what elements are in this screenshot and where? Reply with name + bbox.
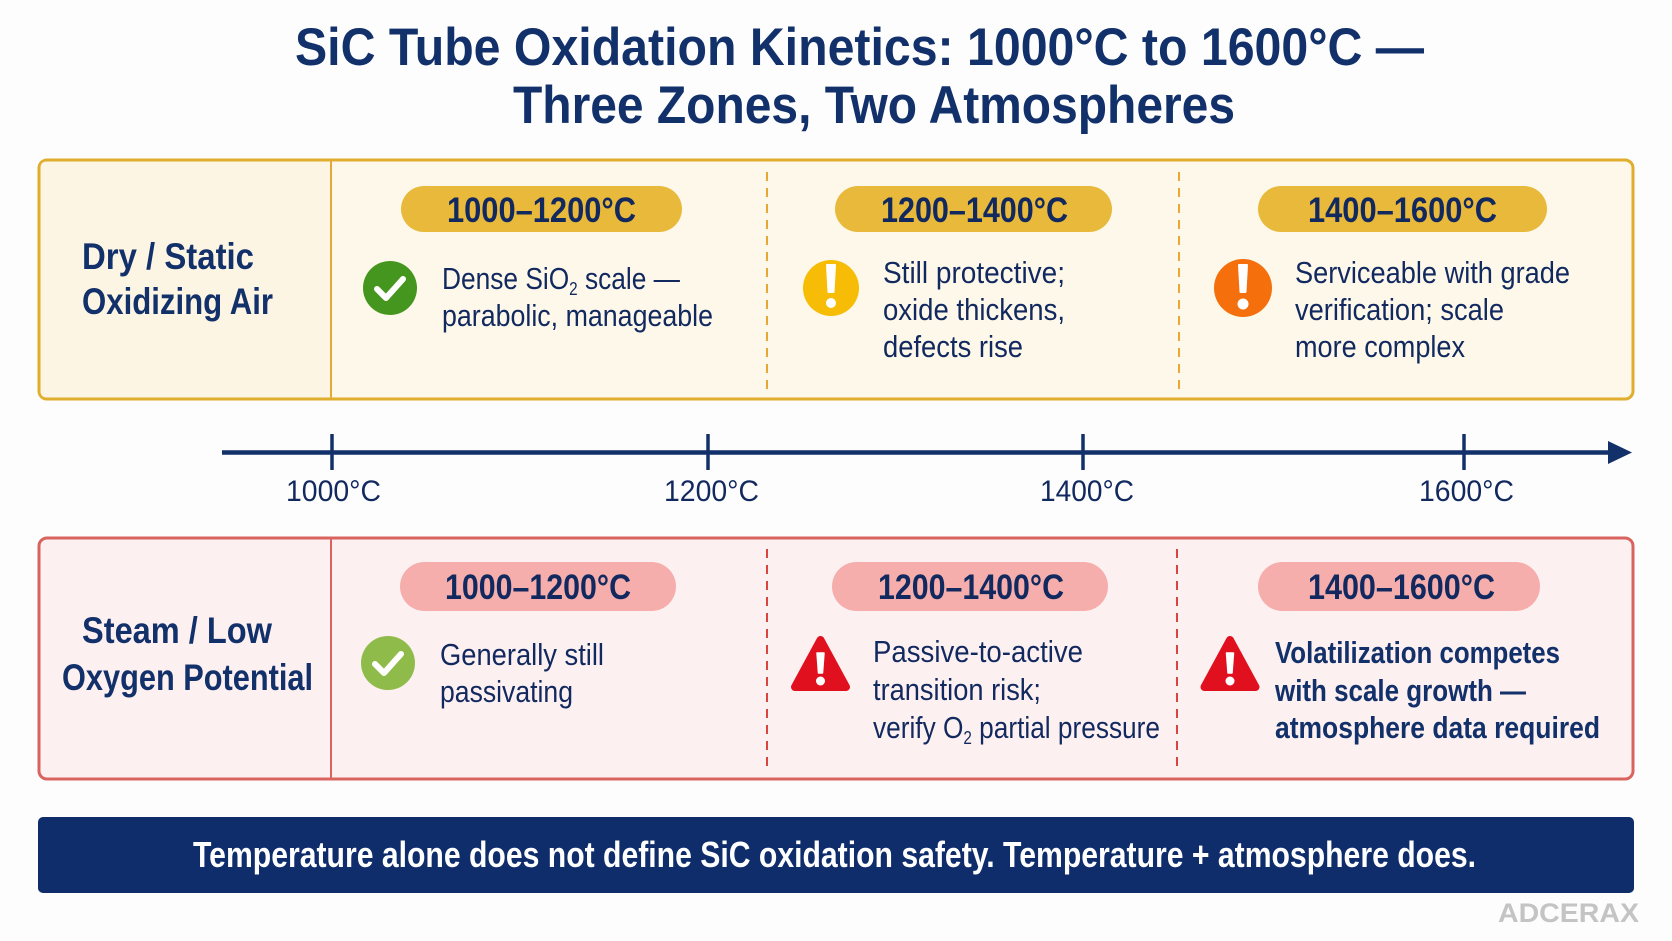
- text: generally passivating: passivating: [440, 674, 573, 709]
- temperature axis: 1000°C: [286, 475, 381, 508]
- pill: dry 1000–1200: 1000–1200°C: [447, 191, 636, 230]
- title: Three Zones, Two Atmospheres: [513, 76, 1235, 135]
- text: dense scale: scale —: [578, 261, 680, 296]
- pill: steam 1400–1600: [1258, 562, 1540, 611]
- icon: red warning triangle: [795, 640, 846, 687]
- text: passive to active: 2: [963, 728, 972, 748]
- row label: steam: Steam / Low: [82, 610, 272, 651]
- row label: dry air: Oxidizing Air: [82, 281, 273, 322]
- pill: steam 1000–1200: [400, 562, 676, 611]
- text: passive to active: transition risk;: [873, 672, 1041, 707]
- text: still protective: [883, 255, 1065, 364]
- row label: steam: Oxygen Potential: [62, 657, 313, 698]
- pill: dry 1200–1400: [835, 186, 1112, 232]
- text: passive to active: Passive-to-active: [873, 634, 1083, 669]
- pill: steam 1400–1600: 1400–1600°C: [1308, 568, 1495, 607]
- text: volatilization: atmosphere data required: [1275, 710, 1600, 745]
- text: serviceable: [1295, 255, 1570, 364]
- title: SiC Tube Oxidation Kinetics: 1000°C to 1600°C —: [295, 18, 1424, 77]
- icon: yellow caution: [803, 260, 859, 316]
- row label: steam: [62, 610, 313, 698]
- text: generally passivating: [440, 637, 604, 709]
- text: dense scale: [442, 261, 713, 333]
- text: passive to active: partial pressure: [972, 710, 1160, 745]
- pill: steam 1200–1400: 1200–1400°C: [878, 568, 1064, 607]
- temperature axis: 1400°C: [1040, 475, 1134, 508]
- takeaway banner: [38, 817, 1634, 893]
- text: generally passivating: Generally still: [440, 637, 604, 672]
- text: volatilization: Volatilization competes: [1275, 635, 1560, 670]
- icon: red warning triangle: [1204, 640, 1256, 687]
- text: passive to active: [873, 634, 1160, 748]
- panel: steam / low oxygen potential: [39, 538, 1633, 779]
- text: volatilization: with scale growth —: [1274, 673, 1526, 708]
- title: [295, 18, 1424, 135]
- pill: steam 1200–1400: [832, 562, 1108, 611]
- text: still protective: defects rise: [883, 329, 1023, 364]
- pill: steam 1000–1200: 1000–1200°C: [445, 568, 631, 607]
- text: volatilization: [1274, 635, 1600, 745]
- row label: dry air: [82, 236, 273, 322]
- text: still protective: oxide thickens,: [883, 292, 1065, 327]
- row label: dry air: Dry / Static: [82, 236, 254, 277]
- temperature axis: [222, 434, 1632, 508]
- pill: dry 1000–1200: [401, 186, 682, 232]
- pill: dry 1400–1600: 1400–1600°C: [1308, 191, 1497, 230]
- panel: dry / static oxidizing air: [39, 160, 1633, 399]
- watermark: ADCERAX: [1498, 898, 1639, 928]
- text: dense scale: parabolic, manageable: [442, 298, 713, 333]
- icon: orange warning: [1214, 259, 1272, 317]
- pill: dry 1400–1600: [1258, 186, 1547, 232]
- text: serviceable: more complex: [1295, 329, 1465, 364]
- text: still protective: Still protective;: [883, 255, 1065, 290]
- temperature axis: 1200°C: [664, 475, 759, 508]
- text: dense scale: Dense SiO: [442, 261, 592, 296]
- text: passive to active: verify O: [873, 710, 980, 745]
- text: dense scale: 2: [569, 279, 578, 299]
- temperature axis: 1600°C: [1419, 475, 1514, 508]
- pill: dry 1200–1400: 1200–1400°C: [881, 191, 1068, 230]
- icon: light green check: [361, 636, 415, 690]
- text: serviceable: Serviceable with grade: [1295, 255, 1570, 290]
- text: serviceable: verification; scale: [1295, 292, 1504, 327]
- icon: green check: [363, 261, 417, 315]
